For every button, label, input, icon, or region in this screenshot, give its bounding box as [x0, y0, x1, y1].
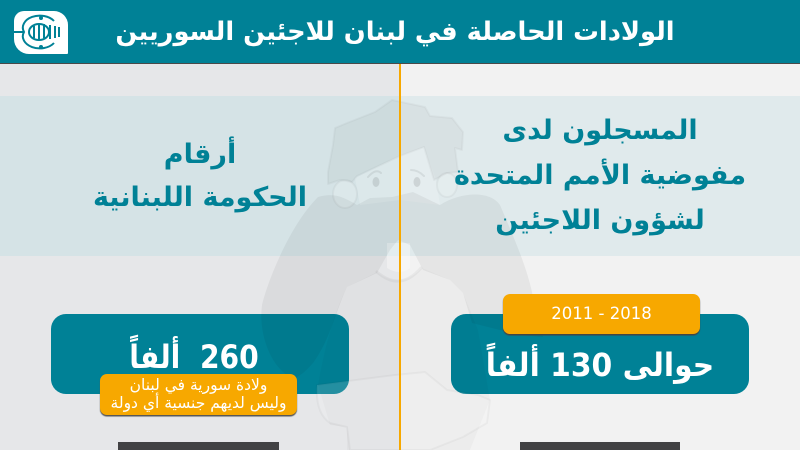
neck: [387, 243, 410, 272]
illustration: worried person covering mouth: [262, 100, 532, 450]
right value text: حوالى 130 ألفاً: [486, 346, 714, 384]
right dark bar: [520, 442, 680, 450]
left heading band: [0, 96, 400, 256]
face: [355, 147, 440, 205]
left value text: 260 ألفاً: [129, 338, 259, 376]
right heading: لشؤون اللاجئين: [495, 205, 705, 236]
crossed forearm: [317, 372, 490, 450]
icon: logo: [14, 11, 68, 54]
left orange note: ولادة سورية في لبنان: [130, 376, 267, 394]
left dark bar: [118, 442, 279, 450]
right heading band: [400, 96, 800, 256]
right heading: المسجلون لدى: [502, 115, 698, 146]
torso: [318, 268, 490, 450]
orange divider line: [399, 64, 401, 450]
right orange date tag: 2011 - 2018: [551, 304, 652, 323]
right panel background: [400, 64, 800, 450]
title: الولادات الحاصلة في لبنان للاجئين السوريين: [115, 17, 675, 47]
right arm and hand: [392, 192, 543, 337]
right value box: [451, 314, 749, 394]
left heading: الحكومة اللبنانية: [93, 182, 307, 213]
ears: [333, 180, 357, 208]
hair: [328, 100, 463, 184]
right orange date tag: [503, 294, 700, 334]
left orange note: [100, 374, 297, 415]
header bar: [0, 0, 800, 64]
brows: [368, 170, 424, 177]
left orange note: وليس لديهم جنسية أي دولة: [111, 394, 286, 412]
right heading: مفوضية الأمم المتحدة: [454, 160, 746, 191]
left panel background: [0, 64, 400, 450]
right heading: [454, 115, 746, 236]
left heading: [93, 136, 307, 213]
collar: [377, 268, 421, 281]
left arm: [261, 195, 398, 378]
eyes: [372, 177, 380, 187]
left value box: [51, 314, 349, 394]
left heading: أرقام: [164, 139, 236, 170]
